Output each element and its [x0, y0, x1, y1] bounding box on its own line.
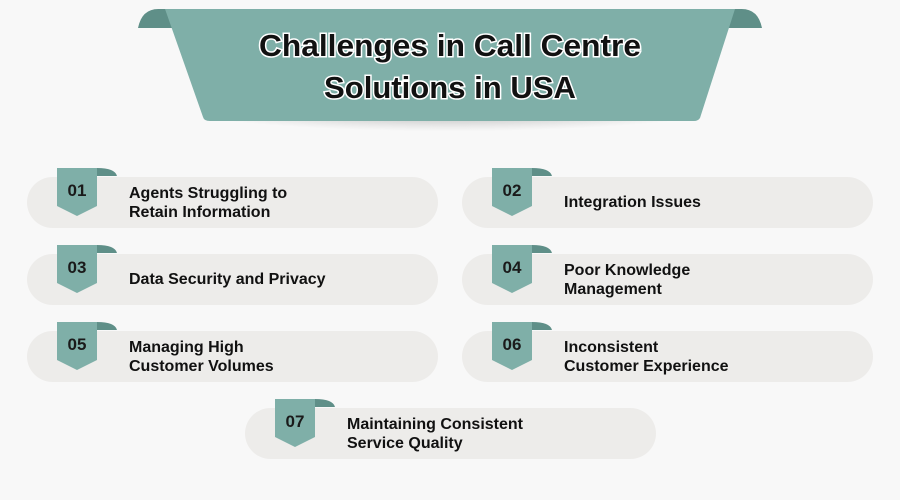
item 02: [462, 177, 873, 228]
item 06: Customer Experience: [564, 358, 729, 374]
item 07: 07: [286, 412, 304, 431]
item 06: 06: [503, 335, 521, 354]
item 07: Service Quality: [347, 434, 463, 452]
title banner: Solutions in USA: [324, 70, 576, 105]
item 02: Integration Issues: [564, 194, 701, 211]
title banner: [138, 9, 762, 128]
item 04: 04: [503, 258, 521, 277]
item 07: Maintaining Consistent: [347, 416, 523, 432]
item 04: Management: [564, 280, 662, 298]
item 06: [462, 331, 873, 382]
item 05: Managing High: [129, 338, 244, 356]
item 07: [245, 408, 656, 459]
item 04: Poor Knowledge: [564, 262, 690, 278]
item 01: [27, 177, 438, 228]
item 03: Data Security and Privacy: [129, 271, 326, 288]
item 05: [27, 331, 438, 382]
item 05: Customer Volumes: [129, 358, 274, 374]
item 01: 01: [68, 181, 86, 200]
item 01: Agents Struggling to: [129, 184, 287, 202]
item 05: 05: [68, 335, 86, 354]
item 02: 02: [503, 181, 521, 200]
item 03: [27, 254, 438, 305]
item 04: [462, 254, 873, 305]
title banner: Challenges in Call Centre: [259, 28, 641, 63]
item 06: Inconsistent: [564, 338, 658, 356]
item 01: Retain Information: [129, 204, 270, 220]
item 03: 03: [68, 258, 86, 277]
